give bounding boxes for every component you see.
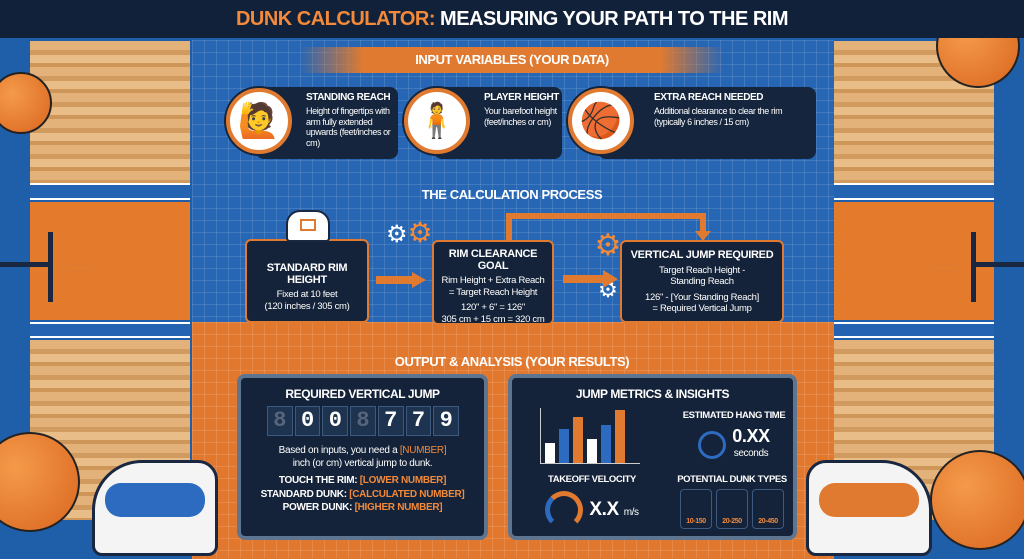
- box: standard rim height: [245, 239, 369, 323]
- result text: TOUCH THE RIM: [LOWER NUMBER]: [279, 475, 446, 486]
- digit display: 8: [273, 408, 286, 433]
- digit display: 8: [356, 408, 370, 433]
- box: rim clearance goal: = Target Reach Height: [449, 286, 537, 298]
- icon: player: 🧍: [416, 102, 458, 140]
- icon: gears: ⚙⚙: [386, 217, 433, 248]
- heading: calculation process: THE CALCULATION PROCESS: [422, 187, 602, 202]
- monitor: jump metrics: JUMP METRICS & INSIGHTS: [576, 387, 729, 401]
- card: extra reach: EXTRA REACH NEEDED: [654, 92, 763, 103]
- box: rim clearance goal: RIM CLEARANCE GOAL: [449, 248, 537, 272]
- card: standing reach: Height of fingertips with arm fully extended upwards (feet/inches or cm): [306, 106, 390, 148]
- arrow: top connector: [506, 213, 711, 240]
- heading: input variables: INPUT VARIABLES (YOUR DATA): [415, 52, 609, 67]
- title bar: [0, 0, 1024, 38]
- center blueprint area: [192, 40, 834, 322]
- box: vertical jump required: Standing Reach: [670, 276, 734, 287]
- digit display: 7: [384, 408, 397, 433]
- arrow 2: [563, 270, 618, 288]
- icon: gears 2: [595, 229, 621, 302]
- monitor: required vertical jump: [237, 374, 488, 540]
- box: vertical jump required: Target Reach Height -: [659, 264, 745, 276]
- card: standing reach: [224, 86, 398, 159]
- result text: inch (or cm) vertical jump to dunk.: [293, 458, 432, 469]
- arrow 1: [376, 272, 426, 288]
- card: player height: PLAYER HEIGHT: [484, 92, 559, 103]
- takeoff velocity: TAKEOFF VELOCITY: [548, 474, 636, 485]
- box: standard rim height: (120 inches / 305 cm): [264, 300, 350, 312]
- icon: hoop right: [971, 232, 1024, 302]
- decorative balls: [0, 72, 52, 134]
- result text: Based on inputs, you need a [NUMBER]: [279, 445, 446, 456]
- hang time: 0.XX: [732, 426, 770, 446]
- bar chart: [540, 408, 640, 464]
- heading: output: OUTPUT & ANALYSIS (YOUR RESULTS): [395, 354, 629, 369]
- box: vertical jump required: VERTICAL JUMP REQUIRED: [631, 249, 773, 261]
- digit display: 9: [440, 408, 453, 433]
- dunk types: [677, 474, 787, 529]
- icon: backboard: [286, 210, 330, 242]
- monitor: jump metrics: [508, 374, 797, 540]
- hang time: ESTIMATED HANG TIME: [683, 410, 785, 421]
- box: vertical jump required: = Required Vertical Jump: [652, 303, 752, 314]
- takeoff velocity: X.X m/s: [589, 499, 639, 520]
- center orange area: [192, 322, 834, 559]
- icon: ball and hoop: 🏀: [580, 102, 622, 140]
- icon: player: [404, 88, 470, 154]
- digit display: 0: [329, 408, 342, 433]
- box: vertical jump required: [620, 240, 784, 323]
- box: rim clearance goal: Rim Height + Extra Reach: [442, 275, 544, 286]
- icon: shoes: [92, 460, 218, 556]
- dunk types: 20-450: [758, 518, 778, 525]
- icon: standing reach: [226, 88, 292, 154]
- digit display: 0: [301, 408, 314, 433]
- box: rim clearance goal: 120" + 6" = 126": [461, 302, 525, 313]
- result text: POWER DUNK: [HIGHER NUMBER]: [283, 502, 442, 513]
- icon: gears 2: ⚙: [598, 277, 618, 302]
- card: extra reach: [566, 86, 816, 159]
- box: standard rim height: STANDARD RIM HEIGHT: [267, 262, 347, 286]
- dunk types: 10-150: [686, 518, 706, 525]
- right court side: [834, 38, 1024, 559]
- takeoff velocity: [545, 474, 639, 524]
- box: rim clearance goal: 305 cm + 15 cm = 320 cm: [442, 314, 544, 324]
- hang time: [683, 410, 786, 459]
- card: extra reach: Additional clearance to clear the rim (typically 6 inches / 15 cm): [654, 106, 782, 126]
- icon: ball and hoop: [568, 88, 634, 154]
- icon: hoop left: [0, 232, 53, 302]
- icon: gears 2: ⚙: [595, 229, 621, 262]
- card: player height: Your barefoot height (feet/inches or cm): [484, 106, 557, 126]
- box: rim clearance goal: [432, 240, 554, 325]
- hang time: seconds: [734, 448, 768, 459]
- monitor: required vertical jump: REQUIRED VERTICAL JUMP: [285, 387, 440, 401]
- digit display: [267, 406, 459, 436]
- digit display: 7: [412, 408, 425, 433]
- title bar: DUNK CALCULATOR: MEASURING YOUR PATH TO THE RIM: [236, 8, 788, 30]
- heading: input variables: [300, 47, 724, 73]
- card: standing reach: STANDING REACH: [306, 92, 390, 103]
- icon: standing reach: 🙋: [238, 102, 280, 140]
- card: player height: [402, 86, 562, 159]
- dunk types: 20-250: [722, 518, 742, 525]
- box: standard rim height: Fixed at 10 feet: [277, 289, 337, 300]
- dunk types: POTENTIAL DUNK TYPES: [677, 474, 787, 485]
- result text: STANDARD DUNK: [CALCULATED NUMBER]: [261, 488, 464, 500]
- left court side: [0, 38, 192, 559]
- box: vertical jump required: 126" - [Your Standing Reach]: [645, 292, 759, 302]
- result text: [260, 445, 464, 513]
